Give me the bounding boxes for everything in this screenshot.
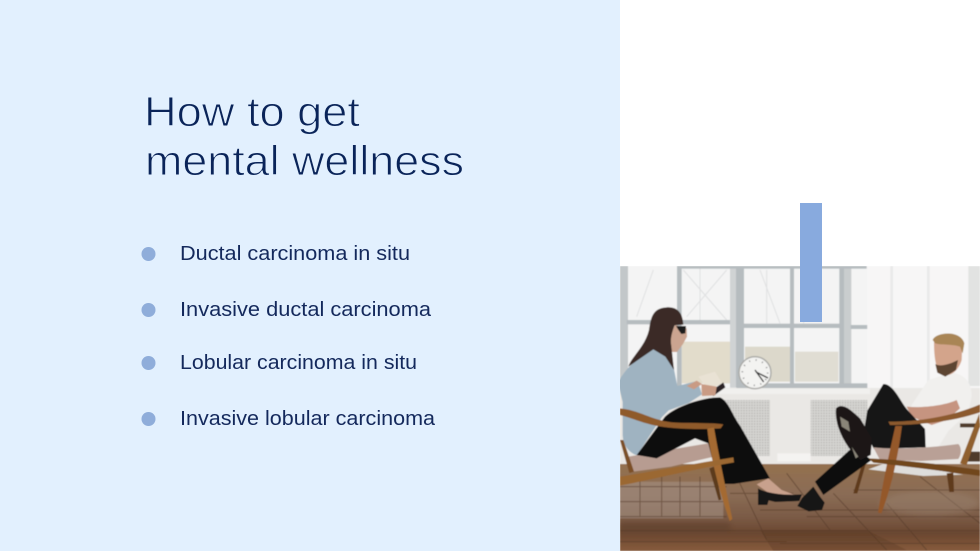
list item: Lobular carcinoma in situ: Lobular carcinoma in situ (180, 352, 417, 374)
woman's chair back leg (709, 466, 721, 500)
wall clock (739, 357, 771, 389)
window and wall backdrop (620, 266, 868, 388)
man: legs and shoes (797, 384, 926, 511)
bullet list (142, 243, 436, 430)
title: mental wellness (145, 137, 464, 184)
title (144, 88, 464, 184)
wooden floor (620, 462, 980, 551)
title: How to get (144, 88, 360, 135)
panel: left background (0, 0, 620, 551)
list item: Invasive ductal carcinoma: Invasive ductal carcinoma (180, 299, 432, 321)
list item: Ductal carcinoma in situ: Ductal carcinoma in situ (180, 243, 410, 265)
woman's chair frame (620, 408, 734, 521)
woman's chair seat (628, 442, 712, 472)
woman: trousers and legs (637, 397, 802, 505)
accent bar (800, 203, 822, 322)
photo: therapist and client seated by a window (618, 266, 980, 551)
man's chair back parts (853, 413, 980, 493)
woman: shirt (618, 348, 702, 455)
woman: book and hands (687, 372, 725, 396)
man's chair (868, 404, 980, 513)
wall and radiators (620, 388, 980, 465)
woman: head and hair (628, 307, 687, 370)
man: torso and head (907, 334, 972, 453)
curtain (867, 266, 980, 391)
list item: Invasive lobular carcinoma: Invasive lobular carcinoma (180, 408, 436, 430)
